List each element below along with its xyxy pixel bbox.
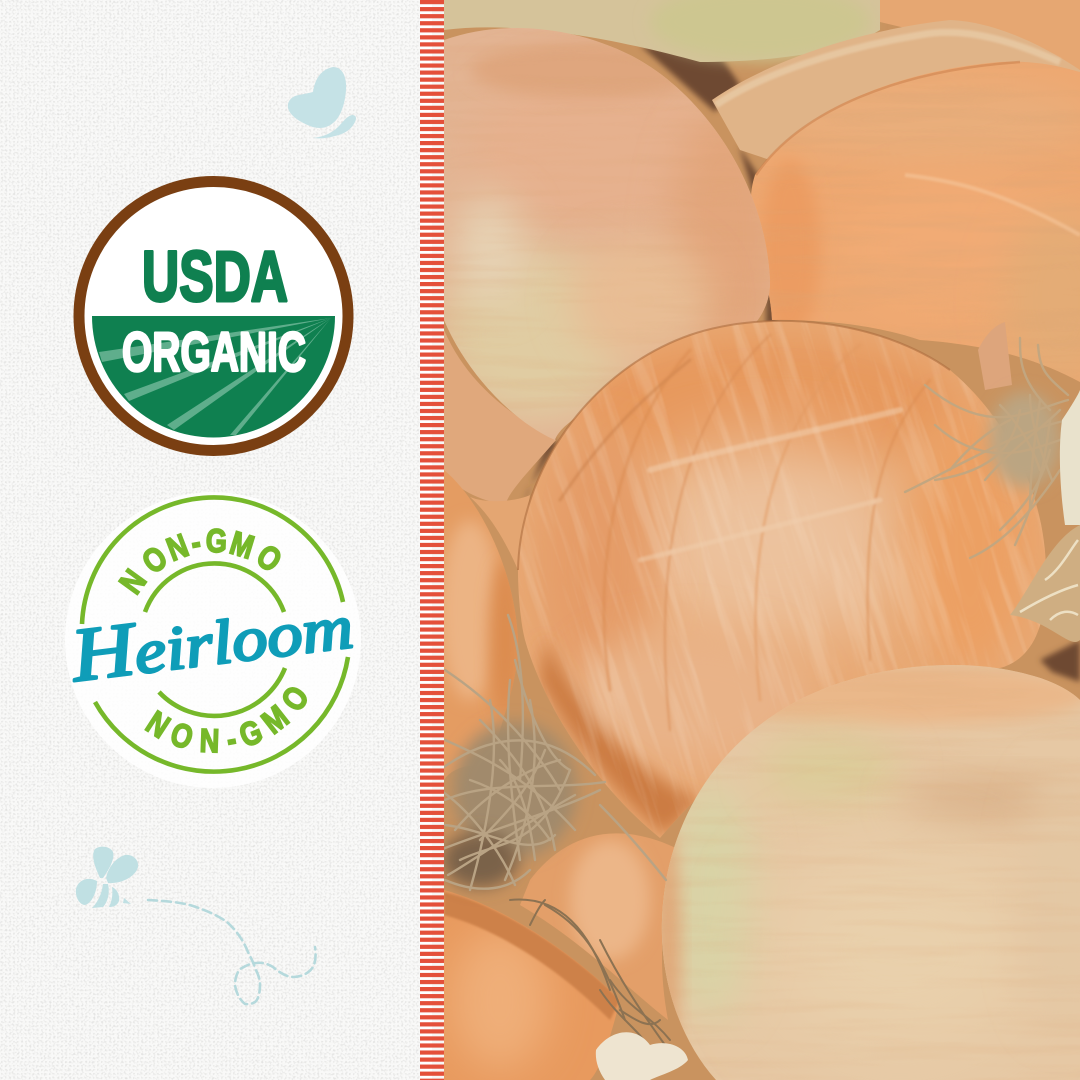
USDA wordmark: USDA (142, 238, 288, 317)
top NON-GMO text: M (226, 525, 258, 566)
striped divider (420, 0, 444, 1080)
top NON-GMO text: - (188, 525, 203, 562)
top NON-GMO text: N (113, 564, 154, 601)
ring arcs (82, 497, 348, 772)
dark shadow gaps between onions (518, 45, 1080, 682)
dashed flight path (148, 900, 316, 1004)
bottom root tuft (510, 900, 670, 1050)
bottom NON-GMO text: O (166, 716, 197, 757)
center onion (518, 321, 1046, 838)
bottom NON-GMO text: O (275, 680, 317, 718)
icon: bee with dashed flight path (76, 847, 316, 1004)
field rays (99, 318, 331, 435)
bottom NON-GMO text: N (199, 723, 220, 760)
onion skin streaks (520, 322, 1042, 823)
bottom NON-GMO text: G (235, 714, 268, 755)
bottom NON-GMO text: - (224, 721, 239, 758)
top right onion (751, 62, 1080, 382)
bottom right onion (655, 660, 1080, 1080)
top NON-GMO text: O (250, 538, 288, 580)
left root tuft (440, 615, 666, 890)
top NON-GMO text: O (136, 540, 174, 581)
left middle onion (444, 470, 518, 780)
lower left background onion (444, 330, 556, 570)
far right onion tops (1010, 390, 1080, 642)
Heirloom script word: Heirloom (66, 580, 357, 698)
top NON-GMO text (113, 523, 288, 601)
fabric background panel (0, 0, 420, 1080)
bottom NON-GMO text: N (140, 705, 176, 746)
badge: Non-GMO Heirloom (65, 492, 361, 788)
bottom NON-GMO text: M (256, 699, 296, 741)
top NON-GMO text: G (205, 523, 228, 560)
icon: butterfly (288, 67, 356, 138)
center onion outline (518, 321, 950, 570)
green field half disc (92, 316, 335, 438)
right root tuft (905, 322, 1068, 558)
ORGANIC wordmark: ORGANIC (122, 320, 306, 383)
top left onion (440, 20, 784, 450)
bottom NON-GMO text (140, 680, 317, 760)
onion peel fragment (596, 1032, 688, 1080)
bottom left onion (444, 885, 624, 1080)
onion photograph (440, 0, 1080, 1080)
top background onions (444, 0, 1080, 160)
badge: USDA Organic (79, 182, 348, 450)
bottom middle onion (520, 834, 674, 1020)
bee wings and body (76, 847, 138, 908)
top NON-GMO text: N (162, 528, 193, 568)
